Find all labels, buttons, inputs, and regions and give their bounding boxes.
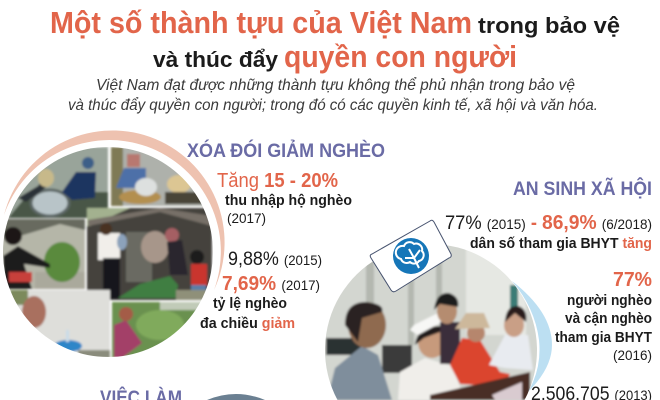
- photo: woman sifting grain: [111, 147, 211, 206]
- stat: poor households insured: (2016): [613, 347, 652, 363]
- photo: woman feeding plants: [0, 219, 85, 289]
- stat: household income: (2017): [227, 210, 266, 226]
- decorative arc: light blue ring: [512, 281, 552, 392]
- stat: insurance coverage: dân số tham gia BHYT tăng: [470, 235, 652, 252]
- photo circle top: employment: [207, 394, 265, 400]
- heading: social security: AN SINH XÃ HỘI: [513, 178, 652, 200]
- stat: household income: thu nhập hộ nghèo: [225, 192, 352, 209]
- stat: multidimensional poverty: tỷ lệ nghèo: [213, 295, 287, 312]
- person: older man: [327, 302, 392, 400]
- title: quyền con người: [284, 39, 517, 74]
- stat: poor households insured: [555, 269, 652, 363]
- photo: woman washing in basin: [0, 147, 108, 218]
- stat: multidimensional poverty: đa chiều giảm: [200, 315, 295, 332]
- photo: water tap at wall: [10, 290, 110, 358]
- stat: household income: [217, 170, 352, 226]
- stat: poor households insured: và cận nghèo: [565, 310, 652, 327]
- intro text: Việt Nam đạt được những thành tựu không thể phủ nhận trong bảo vệ: [96, 76, 575, 94]
- stat: poor households insured: người nghèo: [567, 292, 652, 309]
- title: Một số thành tựu của Việt Nam: [50, 5, 472, 40]
- icon: health insurance card: [370, 220, 451, 292]
- title: và thúc đẩy: [153, 47, 279, 72]
- stat: multidimensional poverty: 9,88% (2015): [228, 249, 322, 270]
- intro text: và thúc đẩy quyền con người; trong đó có các quyền kinh tế, xã hội và văn hóa.: [68, 96, 598, 114]
- photo collage: poverty reduction: [0, 145, 216, 360]
- person: patient in red: [450, 313, 510, 385]
- person: man at back: [434, 293, 460, 364]
- title: trong bảo vệ: [478, 13, 620, 38]
- desk: [430, 372, 530, 400]
- stat: multidimensional poverty: [200, 249, 322, 332]
- stat: household income: Tăng 15 - 20%: [217, 170, 338, 192]
- heading: poverty reduction: XÓA ĐÓI GIẢM NGHÈO: [187, 140, 385, 162]
- photo: health insurance counter: [320, 235, 540, 400]
- person: staff in white: [489, 306, 533, 370]
- photo: woman picking leaves: [112, 302, 210, 358]
- person: nurse: [398, 313, 462, 400]
- stat: multidimensional poverty: 7,69% (2017): [222, 273, 320, 295]
- photo: farmer with buffalo: [87, 208, 212, 300]
- decorative arc: peach ring: [4, 131, 225, 290]
- intro text: [68, 76, 598, 114]
- stat: poor households insured: 77%: [613, 269, 652, 291]
- stat: insurance coverage: [445, 212, 652, 252]
- title: [50, 5, 620, 74]
- stat: poor households insured: tham gia BHYT: [555, 329, 652, 346]
- stat: insurance coverage: 77% (2015) - 86,9% (6/2018): [445, 212, 652, 234]
